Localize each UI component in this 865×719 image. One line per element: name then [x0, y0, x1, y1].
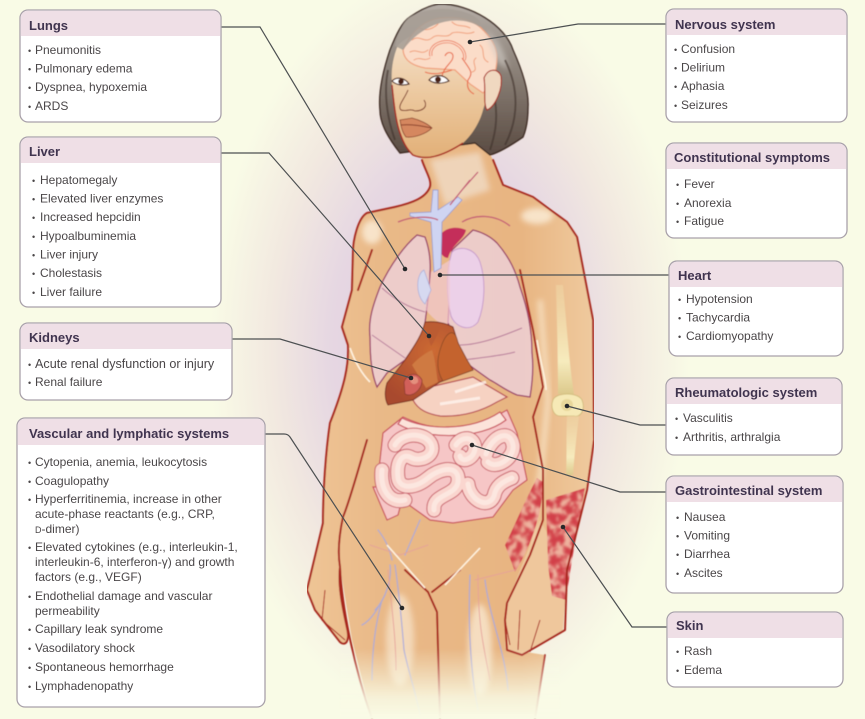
- body outlines: [307, 160, 594, 719]
- leader: vascular: [265, 434, 404, 610]
- panel: gastrointestinal system: Ascites: [684, 566, 723, 580]
- panel: heart: [669, 261, 843, 356]
- panel: lungs: [20, 10, 221, 122]
- panel: constitutional symptoms: Anorexia: [684, 196, 732, 210]
- panel: vascular and lymphatic systems: Vasodilatory shock: [35, 641, 136, 655]
- panel: gastrointestinal system: Gastrointestinal system: [675, 483, 822, 498]
- panel: heart: Heart: [678, 268, 712, 283]
- leg vessels: [362, 520, 515, 715]
- panel: kidneys: •: [28, 378, 31, 388]
- panel: gastrointestinal system: •: [676, 569, 679, 579]
- panel: lungs: •: [28, 102, 31, 112]
- figure: woman with organs: [307, 4, 594, 719]
- panel: liver: •: [32, 250, 35, 260]
- panel: vascular and lymphatic systems: interleukin-6, interferon-γ) and growth: [35, 555, 234, 569]
- panel: constitutional symptoms: Constitutional symptoms: [674, 150, 830, 165]
- great veins: [410, 190, 462, 272]
- leader: liver: [221, 153, 431, 338]
- panel: constitutional symptoms: Fever: [684, 177, 715, 191]
- panel: skin: •: [676, 647, 679, 657]
- panel: nervous system: Aphasia: [681, 79, 725, 93]
- panel: liver: •: [32, 269, 35, 279]
- panel: skin: Rash: [684, 644, 712, 658]
- brain: [403, 17, 497, 94]
- leader: gastrointestinal: [470, 443, 666, 492]
- panel: vascular and lymphatic systems: factors (e.g., VEGF): [35, 570, 142, 584]
- panel: nervous system: •: [674, 82, 677, 92]
- panel: nervous system: •: [674, 45, 677, 55]
- panel: rheumatologic system: Arthritis, arthralgia: [683, 430, 781, 444]
- panel: heart: •: [678, 332, 681, 342]
- panel: vascular and lymphatic systems: Hyperferritinemia, increase in other: [35, 492, 222, 506]
- arm shading: [530, 300, 548, 540]
- panel: vascular and lymphatic systems: Vascular and lymphatic systems: [29, 426, 229, 441]
- panel: lungs: Pneumonitis: [35, 43, 101, 57]
- panel: gastrointestinal system: •: [676, 550, 679, 560]
- hair highlight: [485, 30, 508, 70]
- vein lobe: [418, 270, 431, 304]
- panel: kidneys: •: [28, 360, 31, 370]
- panel: vascular and lymphatic systems: Spontaneous hemorrhage: [35, 660, 174, 674]
- panel: heart: •: [678, 314, 681, 324]
- panel: vascular and lymphatic systems: [17, 418, 265, 707]
- aorta: [438, 228, 466, 258]
- panel: vascular and lymphatic systems: Endothelial damage and vascular: [35, 589, 212, 603]
- panel: liver: •: [32, 232, 35, 242]
- stomach: [413, 377, 507, 416]
- panel: constitutional symptoms: [666, 143, 847, 238]
- hair front: [395, 9, 481, 50]
- intestines: [373, 410, 527, 523]
- panel: vascular and lymphatic systems: Lymphadenopathy: [35, 679, 133, 693]
- panel: vascular and lymphatic systems: •: [28, 663, 31, 673]
- panel: constitutional symptoms: Fatigue: [684, 214, 724, 228]
- panel: vascular and lymphatic systems: •: [28, 682, 31, 692]
- kidney: [404, 374, 422, 395]
- panel: liver: Hypoalbuminemia: [40, 229, 136, 243]
- leader: rheumatologic: [565, 404, 666, 425]
- panel: liver: •: [32, 194, 35, 204]
- panel: vascular and lymphatic systems: •: [28, 495, 31, 505]
- leader: kidneys: [232, 339, 413, 380]
- panel: nervous system: Seizures: [681, 98, 728, 112]
- panel: nervous system: [666, 9, 847, 122]
- panel: lungs: ARDS: [35, 99, 68, 113]
- panel: lungs: Dyspnea, hypoxemia: [35, 80, 147, 94]
- panel: liver: Increased hepcidin: [40, 210, 141, 224]
- ear: [484, 70, 501, 110]
- panel: kidneys: [20, 323, 232, 400]
- panel: liver: Liver: [29, 144, 60, 159]
- neck pallor: [430, 152, 490, 205]
- lungs: [370, 230, 533, 397]
- panel: skin: Edema: [684, 663, 722, 677]
- panel: gastrointestinal system: [666, 476, 843, 593]
- liver right lobe: [438, 333, 473, 381]
- panel: gastrointestinal system: •: [676, 532, 679, 542]
- panel: vascular and lymphatic systems: •: [28, 644, 31, 654]
- panel: vascular and lymphatic systems: D-dimer): [35, 522, 80, 536]
- panel: vascular and lymphatic systems: •: [28, 625, 31, 635]
- panel: rheumatologic system: •: [675, 414, 678, 424]
- pericardium: [426, 260, 450, 324]
- panel: rheumatologic system: [666, 378, 842, 455]
- panel: liver: [20, 137, 221, 307]
- panel: gastrointestinal system: •: [676, 513, 679, 523]
- liver upper lobe: [427, 325, 441, 346]
- panel: lungs: Lungs: [29, 18, 68, 33]
- panel: lungs: •: [28, 83, 31, 93]
- panel: gastrointestinal system: Vomiting: [684, 528, 730, 542]
- panel: lungs: •: [28, 46, 31, 56]
- panel: nervous system: •: [674, 64, 677, 74]
- panel: gastrointestinal system: Diarrhea: [684, 547, 730, 561]
- panel: vascular and lymphatic systems: permeability: [35, 604, 100, 618]
- panel: constitutional symptoms: •: [676, 180, 679, 190]
- leader: skin: [561, 525, 667, 627]
- panel: constitutional symptoms: •: [676, 199, 679, 209]
- shoulder highlights: [362, 208, 553, 696]
- panel: liver: Liver failure: [40, 285, 102, 299]
- stomach highlights: [440, 382, 486, 404]
- hair strands: [386, 60, 516, 150]
- panel: vascular and lymphatic systems: •: [28, 592, 31, 602]
- skin highlights: [350, 340, 546, 588]
- panel: kidneys: Renal failure: [35, 375, 103, 389]
- leader: lungs: [221, 27, 407, 271]
- panel: vascular and lymphatic systems: Cytopenia, anemia, leukocytosis: [35, 455, 207, 469]
- body silhouette: [307, 138, 593, 719]
- rash on abdomen and forearm: [504, 478, 586, 600]
- leader: nervous system: [468, 24, 666, 44]
- panel: liver: Hepatomegaly: [40, 173, 117, 187]
- leader: heart: [438, 273, 669, 277]
- panel: vascular and lymphatic systems: acute-phase reactants (e.g., CRP,: [35, 507, 215, 521]
- panel: vascular and lymphatic systems: •: [28, 543, 31, 553]
- panel: skin: Skin: [676, 618, 704, 633]
- panel: vascular and lymphatic systems: Capillary leak syndrome: [35, 622, 163, 636]
- panel: lungs: •: [28, 64, 31, 74]
- hand fingers: [322, 590, 540, 652]
- lung fissures: [372, 288, 522, 360]
- panel: skin: [667, 612, 843, 687]
- heart: [447, 248, 484, 328]
- hair back: [380, 4, 528, 155]
- face: [392, 29, 492, 157]
- background glow: [210, 0, 690, 719]
- panel: rheumatologic system: •: [675, 433, 678, 443]
- panel: rheumatologic system: Rheumatologic system: [675, 385, 817, 400]
- right-side lung: [448, 230, 533, 397]
- panel: rheumatologic system: Vasculitis: [683, 411, 733, 425]
- panel: constitutional symptoms: •: [676, 217, 679, 227]
- panel: skin: •: [676, 666, 679, 676]
- panel: nervous system: Delirium: [681, 60, 725, 74]
- panel: liver: Elevated liver enzymes: [40, 192, 163, 206]
- eyes: [392, 76, 449, 85]
- panel: nervous system: Nervous system: [675, 17, 775, 32]
- panel: kidneys: Acute renal dysfunction or injury: [35, 357, 215, 371]
- panel: vascular and lymphatic systems: •: [28, 477, 31, 487]
- liver central lobe: [412, 350, 438, 388]
- panel: liver: •: [32, 213, 35, 223]
- hand fill: [505, 520, 567, 655]
- panel: nervous system: Confusion: [681, 42, 735, 56]
- panel: liver: Liver injury: [40, 248, 98, 262]
- leader lines: [221, 24, 669, 627]
- lips: [400, 118, 432, 137]
- leg fade: [340, 648, 560, 719]
- panel: liver: •: [32, 176, 35, 186]
- panel: vascular and lymphatic systems: Elevated cytokines (e.g., interleukin-1,: [35, 540, 238, 554]
- panel: gastrointestinal system: Nausea: [684, 510, 726, 524]
- upper arm bone and forearm bones: [552, 285, 583, 475]
- panel: liver: Cholestasis: [40, 266, 102, 280]
- panel: heart: Hypotension: [686, 292, 753, 306]
- panel: nervous system: •: [674, 101, 677, 111]
- neck vessels: [398, 172, 510, 226]
- nose: [400, 90, 426, 111]
- panel: liver: •: [32, 288, 35, 298]
- left-side lung: [370, 235, 430, 387]
- panel: heart: •: [678, 295, 681, 305]
- panel: vascular and lymphatic systems: •: [28, 458, 31, 468]
- panel: heart: Tachycardia: [686, 310, 750, 324]
- panel: lungs: Pulmonary edema: [35, 62, 133, 76]
- panel: heart: Cardiomyopathy: [686, 329, 773, 343]
- panel: kidneys: Kidneys: [29, 330, 80, 345]
- liver: [385, 322, 473, 405]
- panel: vascular and lymphatic systems: Coagulopathy: [35, 474, 109, 488]
